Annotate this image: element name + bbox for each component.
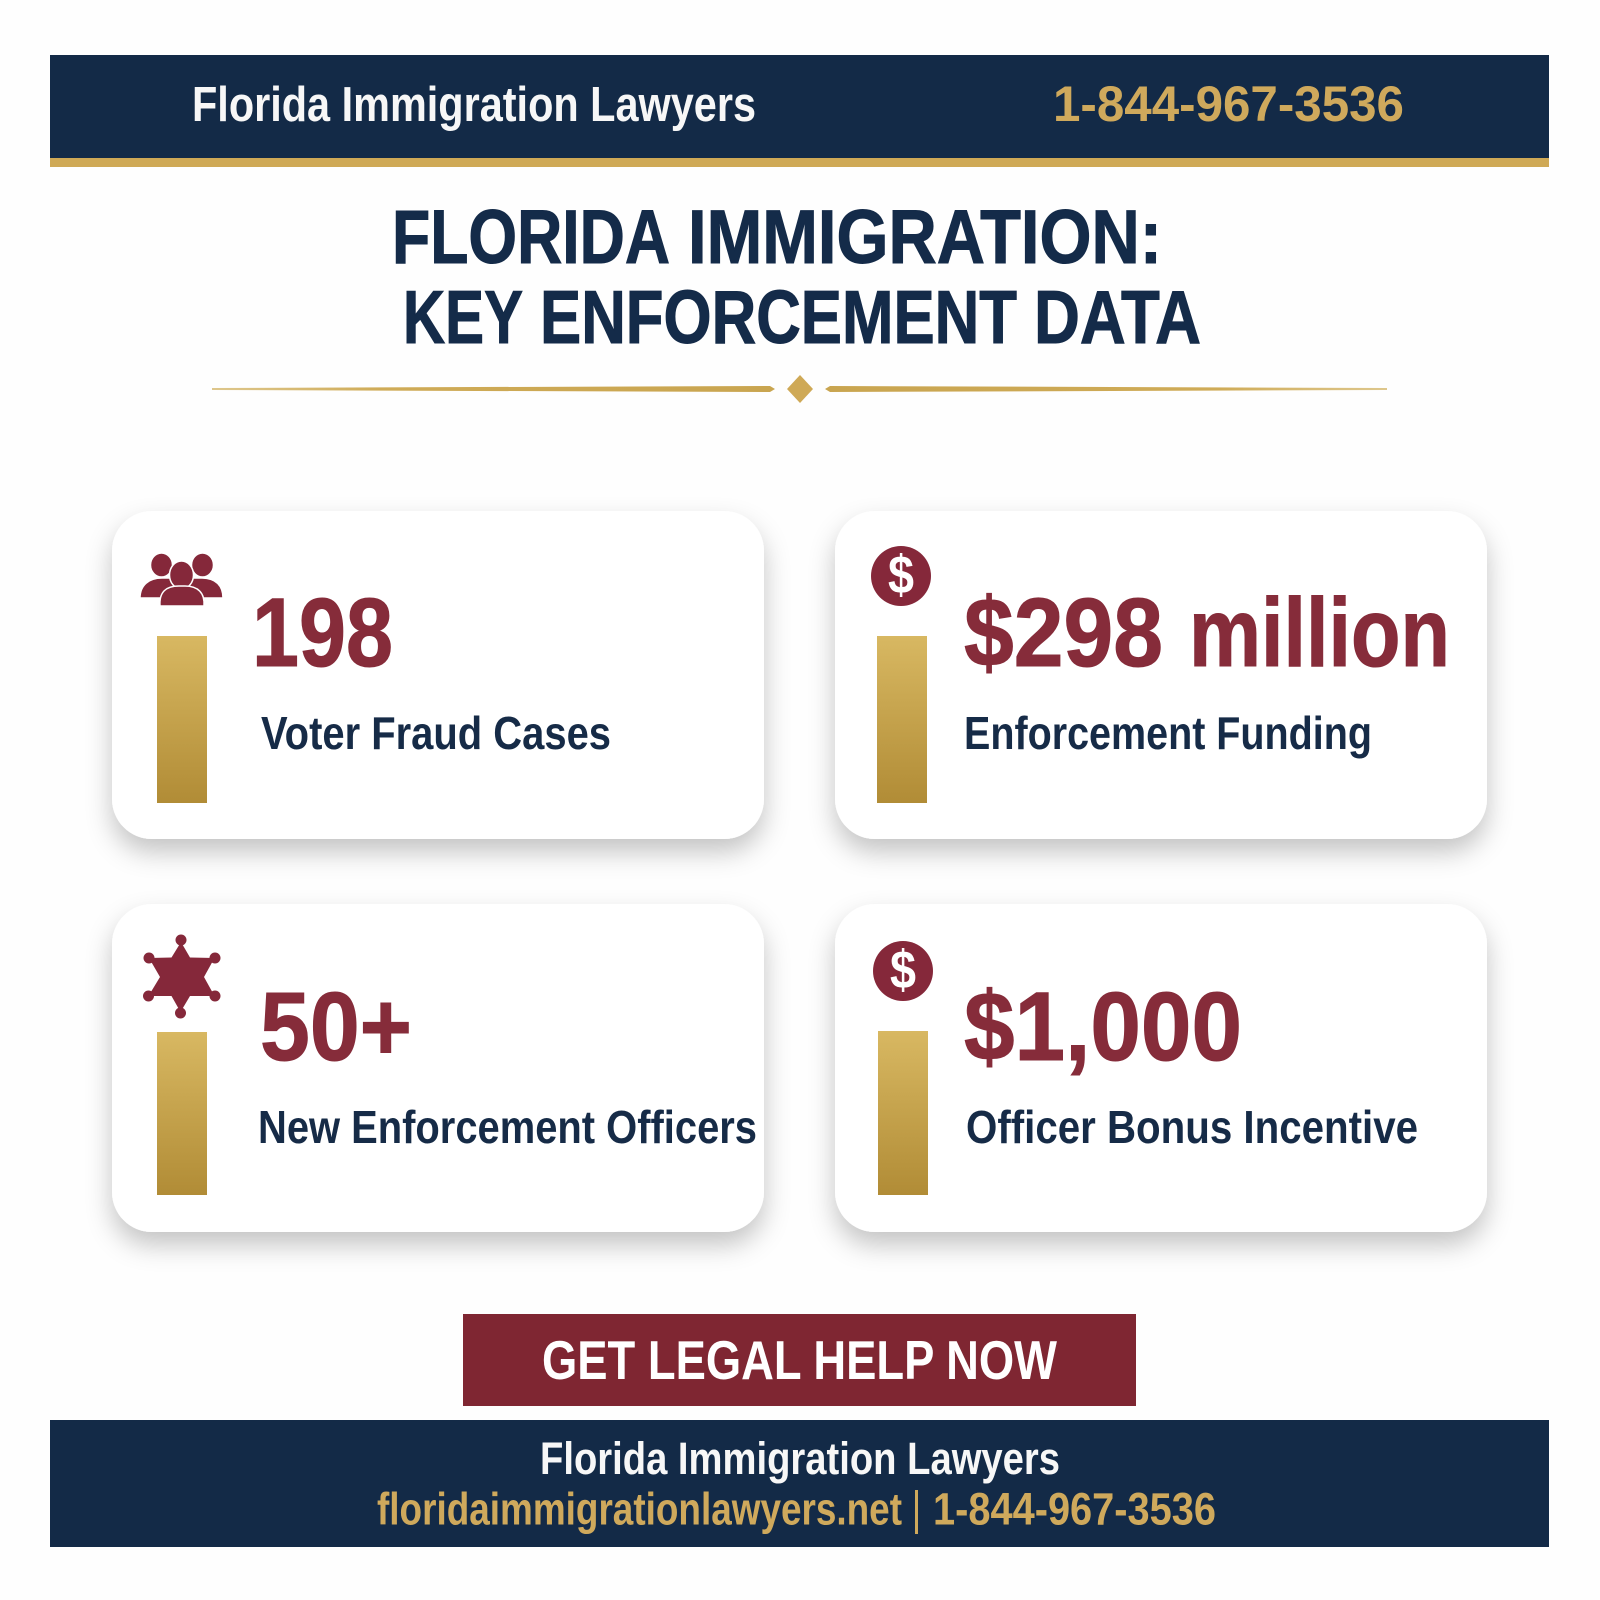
main title: IMMIGRATION:: [688, 195, 1162, 280]
stat value: 50+: [260, 972, 412, 1081]
stat value: [964, 578, 1450, 687]
footer contact line: 1-844-967-3536: [933, 1484, 1216, 1534]
header firm name: Florida Immigration Lawyers: [192, 78, 756, 132]
header phone number: 1-844-967-3536: [1053, 76, 1404, 132]
footer contact line: floridaimmigrationlawyers.net: [377, 1484, 902, 1534]
panel: voter fraud cases: [112, 511, 764, 839]
icon: dollar coin: $: [890, 940, 916, 1000]
panel: enforcement funding: [835, 511, 1487, 839]
stat label: New Enforcement Officers: [258, 1101, 757, 1153]
icon: dollar coin: [871, 545, 931, 606]
title divider with diamond: [212, 375, 1387, 403]
stat value: $1,000: [964, 972, 1242, 1081]
accent bar: [157, 1032, 207, 1195]
stat label: Officer Bonus Incentive: [966, 1101, 1418, 1153]
footer firm name: Florida Immigration Lawyers: [540, 1433, 1060, 1484]
accent bar: [157, 636, 207, 803]
stat value: million: [1189, 578, 1450, 687]
accent bar: [878, 1031, 928, 1195]
panel: officer bonus incentive: [835, 904, 1487, 1232]
call to action button: GET LEGAL HELP NOW: [542, 1329, 1057, 1391]
main title: DATA: [1034, 275, 1201, 359]
call to action button: [463, 1314, 1136, 1406]
main title: [392, 195, 1201, 359]
stat label: Enforcement Funding: [964, 707, 1372, 759]
header banner: [50, 55, 1549, 167]
icon: group of people: [140, 553, 223, 606]
accent bar: [877, 636, 927, 803]
panel: new enforcement officers: [112, 904, 764, 1232]
main title: KEY: [403, 275, 523, 359]
icon: dollar coin: [873, 940, 933, 1001]
main title: FLORIDA: [392, 195, 670, 280]
stat label: Voter Fraud Cases: [261, 707, 611, 759]
icon: dollar coin: $: [888, 545, 914, 605]
footer banner: [50, 1420, 1549, 1547]
icon: sheriff star: [143, 934, 220, 1018]
stat value: $298: [964, 578, 1163, 687]
main title: ENFORCEMENT: [540, 275, 1017, 359]
stat value: 198: [252, 578, 393, 687]
